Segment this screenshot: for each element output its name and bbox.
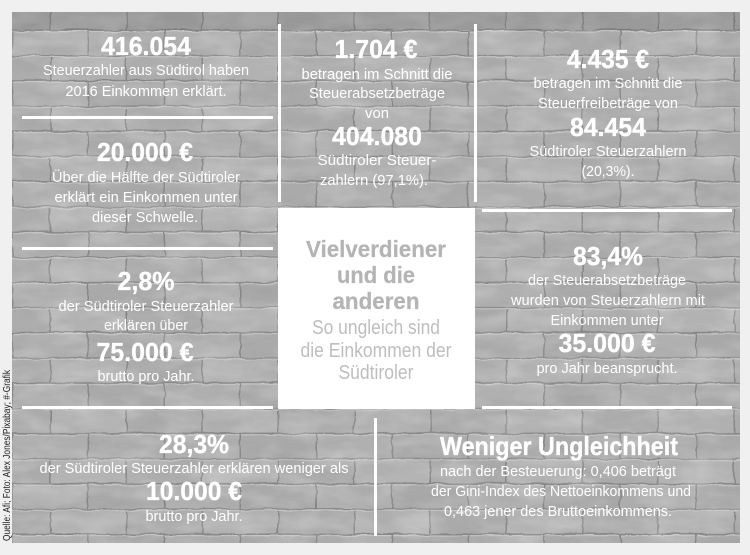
panel: less inequality: Weniger Ungleichheit (440, 431, 678, 461)
panel: less inequality (431, 431, 691, 520)
panel: 1.704 euro deductions: von (365, 105, 389, 122)
divider (474, 24, 477, 202)
title (306, 236, 446, 314)
panel: less inequality: der Gini-Index des Nettoeinkommens und (431, 483, 691, 500)
panel: less inequality: nach der Besteuerung: 0,406 beträgt (440, 463, 677, 480)
subtitle: So ungleich sind (312, 317, 440, 339)
panel: 1.704 euro deductions: Südtiroler Steuer- (318, 152, 436, 169)
panel: 1.704 euro deductions: Steuerabsetzbeträge (309, 85, 445, 102)
panel: 20.000 euro threshold: Über die Hälfte der Südtiroler (52, 168, 240, 186)
source credit: Quelle: Afi; Foto: Alex Jones/Pixabay; #-Grafik (2, 369, 13, 541)
panel: 83,4 percent: wurden von Steuerzahlern mit (510, 292, 706, 309)
panel: 416.054 taxpayers: 2016 Einkommen erklärt. (66, 83, 226, 100)
panel: 20.000 euro threshold: 20.000 € (97, 137, 193, 167)
divider (374, 418, 377, 536)
panel: 83,4 percent: 35.000 € (558, 328, 656, 358)
panel: 2,8 percent (58, 266, 234, 385)
divider (278, 24, 281, 202)
panel: 4.435 euro allowances: betragen im Schnitt die (534, 75, 682, 92)
panel: 1.704 euro deductions: 404.080 (332, 121, 422, 151)
panel: 416.054 taxpayers: Steuerzahler aus Südtirol haben (43, 62, 249, 79)
panel: 2,8 percent: 75.000 € (96, 337, 194, 367)
panel: 416.054 taxpayers: 416.054 (101, 31, 192, 61)
panel: 20.000 euro threshold (52, 137, 240, 226)
panel: 1.704 euro deductions (302, 34, 452, 189)
panel: 83,4 percent: 83,4% (573, 241, 643, 271)
title: anderen (332, 288, 420, 314)
panel: 4.435 euro allowances: 84.454 (570, 112, 647, 142)
panel: 83,4 percent: pro Jahr beansprucht. (536, 360, 678, 377)
panel: 4.435 euro allowances: Südtiroler Steuerzahlern (530, 143, 686, 160)
panel: central title box (278, 208, 475, 409)
panel: 4.435 euro allowances (530, 44, 686, 180)
panel: 28,3 percent: der Südtiroler Steuerzahler erklären weniger als (40, 460, 348, 477)
panel: 83,4 percent: der Steuerabsetzbeträge (528, 272, 686, 289)
panel: 83,4 percent (510, 241, 706, 377)
panel: 4.435 euro allowances: Steuerfreibeträge von (538, 95, 678, 112)
panel: 1.704 euro deductions: zahlern (97,1%). (320, 172, 428, 189)
panel: 28,3 percent: 28,3% (159, 429, 229, 459)
panel: 2,8 percent: 2,8% (118, 266, 174, 296)
panel: 2,8 percent: brutto pro Jahr. (98, 368, 194, 385)
panel: 1.704 euro deductions: betragen im Schnitt die (302, 66, 452, 83)
divider (22, 116, 273, 119)
panel: 20.000 euro threshold: dieser Schwelle. (92, 209, 198, 226)
subtitle: Südtiroler (338, 362, 414, 384)
subtitle: die Einkommen der (300, 340, 452, 362)
panel: 1.704 euro deductions: 1.704 € (334, 34, 418, 64)
panel: 4.435 euro allowances: 4.435 € (567, 44, 649, 74)
panel: 2,8 percent: erklären über (104, 317, 188, 334)
divider (482, 406, 732, 409)
panel: 28,3 percent (40, 429, 348, 525)
panel: 2,8 percent: der Südtiroler Steuerzahler (58, 298, 234, 315)
divider (482, 209, 732, 212)
panel: less inequality: 0,463 jener des Bruttoeinkommens. (444, 503, 672, 520)
panel: 28,3 percent: brutto pro Jahr. (146, 508, 242, 525)
panel: 4.435 euro allowances: (20,3%). (582, 163, 634, 180)
panel: 28,3 percent: 10.000 € (146, 476, 242, 506)
title: Vielverdiener (306, 236, 446, 262)
panel: 20.000 euro threshold: erklärt ein Einkommen unter (54, 189, 238, 206)
panel: 83,4 percent: Einkommen unter (550, 312, 664, 329)
subtitle (300, 317, 452, 384)
divider (22, 247, 273, 250)
panel: 416.054 taxpayers (43, 31, 249, 100)
title: und die (337, 262, 415, 288)
divider (22, 406, 273, 409)
